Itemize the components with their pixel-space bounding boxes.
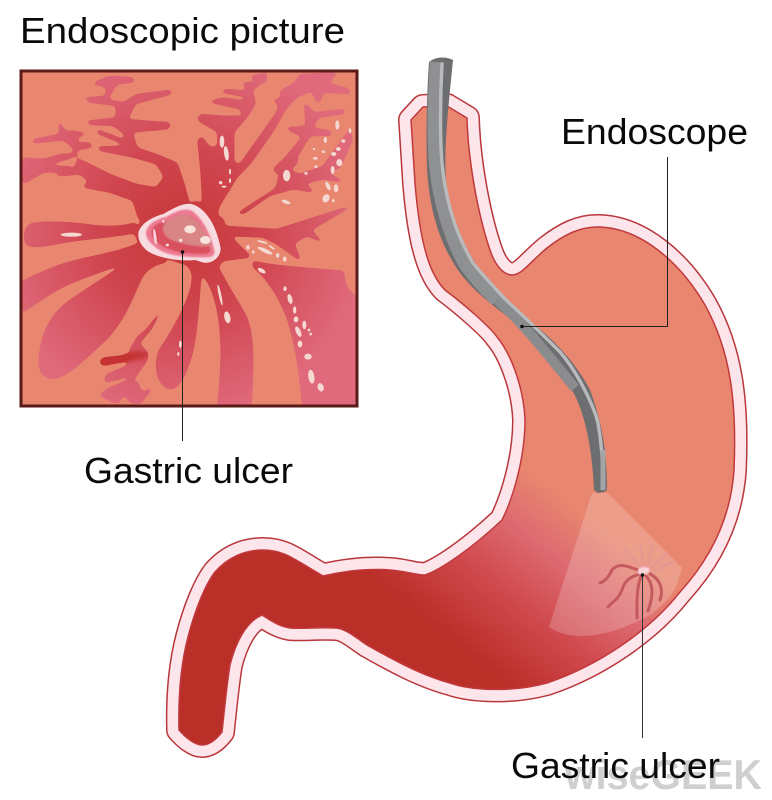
panel: endoscopic picture <box>21 71 357 407</box>
watermark: wiseGEEK <box>564 751 762 798</box>
label: gastric ulcer (panel): Gastric ulcer <box>84 450 293 491</box>
white spots <box>61 120 351 392</box>
ulcer crater <box>138 204 221 263</box>
vessel network <box>23 73 357 407</box>
endoscope light cone <box>549 493 682 636</box>
heading: endoscopic picture: Endoscopic picture <box>20 10 345 51</box>
stomach illustration <box>179 106 735 745</box>
panel frame <box>21 71 357 406</box>
leader line: panel ulcer <box>181 250 184 441</box>
endoscope <box>427 58 607 493</box>
label: gastric ulcer (stomach): Gastric ulcer <box>511 745 720 786</box>
leader line: endoscope <box>520 157 668 328</box>
small ulcer with vessels <box>600 545 672 618</box>
label: endoscope: Endoscope <box>561 111 748 152</box>
leader line: stomach ulcer <box>641 573 644 738</box>
